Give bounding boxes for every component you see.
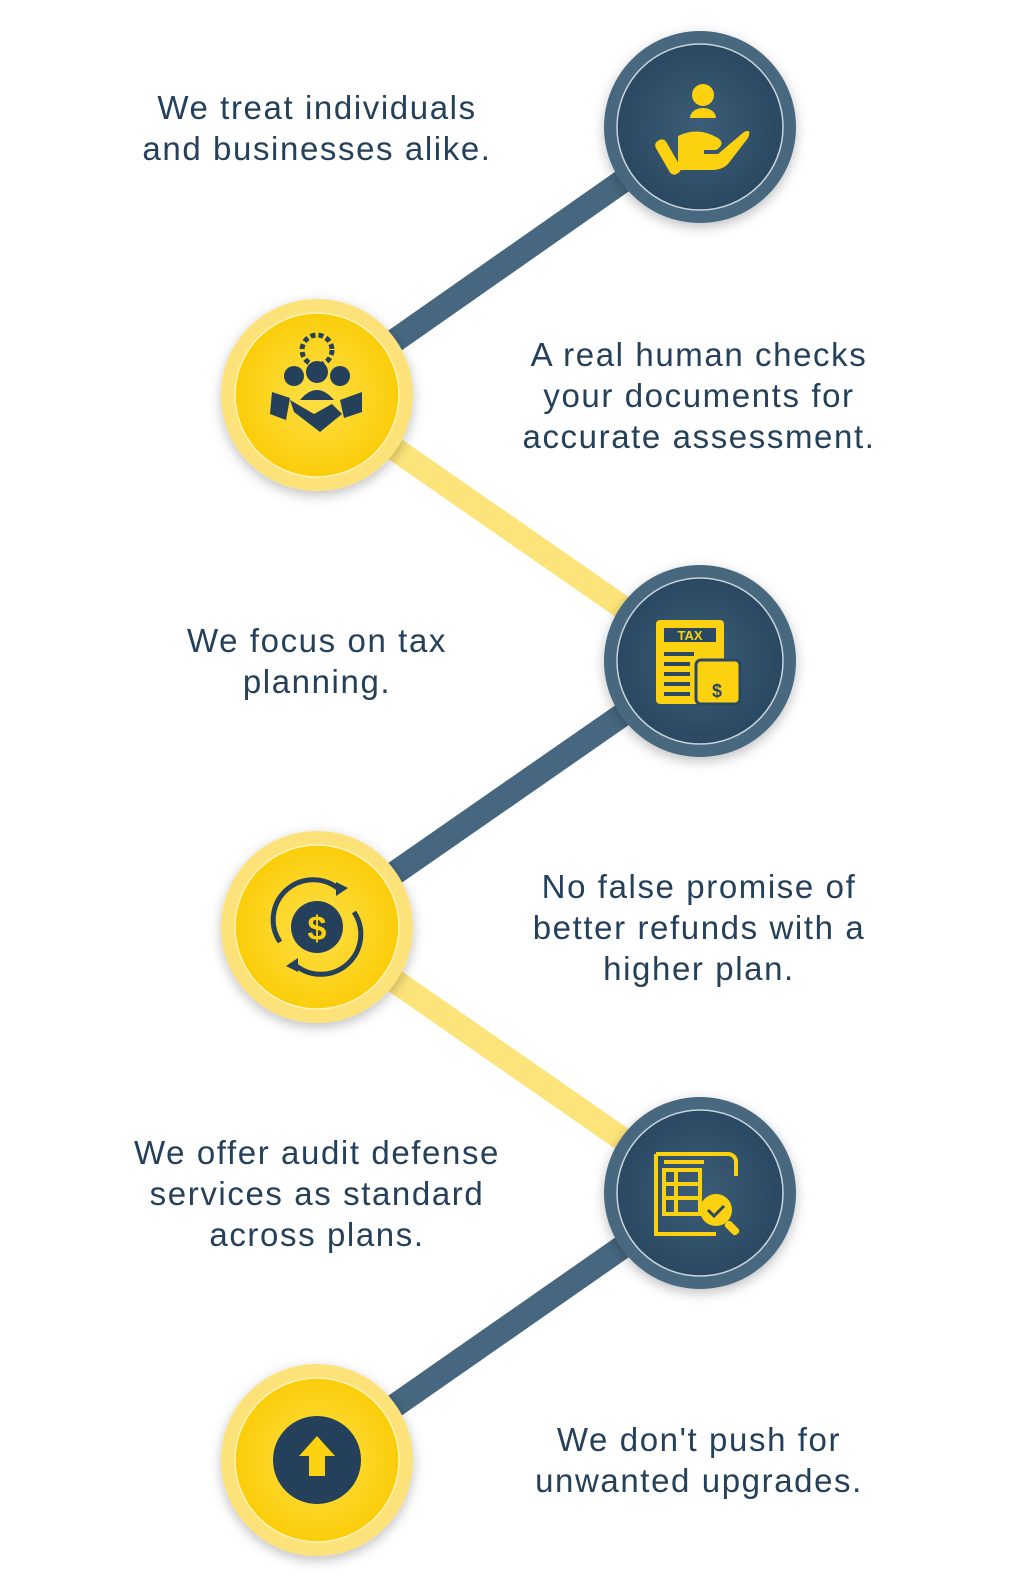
text 4: [533, 868, 865, 987]
text 4: higher plan.: [603, 950, 795, 987]
text 2: A real human checks: [531, 336, 867, 373]
text 5: [134, 1134, 500, 1253]
circle 6: upgrade arrow: [221, 1364, 413, 1556]
text 3: We focus on tax: [187, 622, 447, 659]
text 4: No false promise of: [542, 868, 856, 905]
circle 3: tax document: TAX: [677, 628, 703, 643]
circle 3: tax document: [604, 565, 796, 757]
text 5: We offer audit defense: [134, 1134, 500, 1171]
text 2: your documents for: [543, 377, 855, 414]
circle 1: hand with person: [604, 31, 796, 223]
circle 4: dollar cycle: $: [308, 910, 327, 948]
text 5: across plans.: [209, 1216, 425, 1253]
text 1: and businesses alike.: [142, 130, 492, 167]
connectors: [317, 127, 700, 1460]
text 3: planning.: [243, 663, 391, 700]
text 1: We treat individuals: [157, 89, 477, 126]
text 4: better refunds with a: [533, 909, 865, 946]
text 5: services as standard: [150, 1175, 484, 1212]
text 6: We don't push for: [557, 1421, 841, 1458]
text 6: unwanted upgrades.: [535, 1462, 863, 1499]
circle 4: dollar cycle: [221, 831, 413, 1023]
text 2: [522, 336, 875, 455]
circle 3: tax document: $: [712, 681, 722, 701]
text 6: [535, 1421, 863, 1499]
circle 5: audit document: [604, 1097, 796, 1289]
circle 2: team handshake: [221, 299, 413, 491]
text 2: accurate assessment.: [522, 418, 875, 455]
text 1: [142, 89, 492, 167]
text 3: [187, 622, 447, 700]
